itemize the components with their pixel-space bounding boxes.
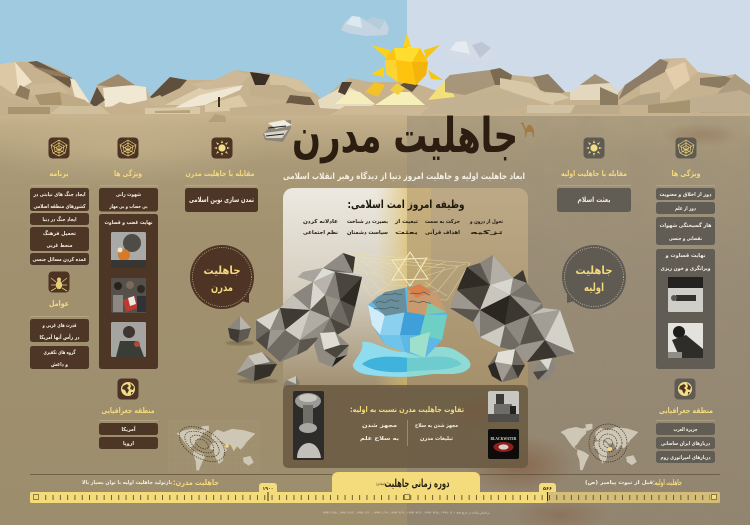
- box: extreme anger with photos: نهایت غضب و قساوت: [104, 220, 152, 226]
- low-poly mountains: [0, 58, 750, 122]
- icon: globe: [118, 378, 138, 400]
- box: extreme anger with photos: [99, 214, 158, 369]
- icon: globe: [674, 378, 696, 400]
- list: program items: [30, 188, 89, 265]
- list: regions: آمریکا: [122, 425, 136, 433]
- logo: Blackwater: [488, 429, 519, 459]
- duty: inner transformation: [469, 219, 503, 236]
- heading: geographic region: منطقه جغرافیایی: [659, 406, 713, 415]
- duty columns: [303, 218, 503, 236]
- list: early features: هار گسیختگی شهوات: [660, 222, 712, 229]
- title: جاهلیت مدرن: [292, 108, 518, 164]
- list: early features: [656, 188, 715, 245]
- panel: geography (early): [656, 378, 715, 463]
- difference: armed propaganda: تبلیغات مدرن: [420, 436, 453, 442]
- timeline line: [30, 473, 720, 476]
- difference: armed with science: به سلاح علم: [360, 436, 399, 442]
- speech bubble: early ignorance: اولیه: [584, 281, 604, 294]
- tab: timeline title: (میلادی): [376, 482, 385, 486]
- icon: camel: [520, 122, 534, 137]
- duty: following the mission: [394, 219, 418, 236]
- center panel: upper: [283, 188, 528, 388]
- duty: following the mission: تبعیت از: [394, 219, 418, 225]
- duty: inner transformation: تحول از درون و: [469, 219, 503, 225]
- tab: year 566: ۵۶۶: [543, 487, 552, 492]
- icon: sun: [212, 138, 232, 158]
- tab: timeline title: [376, 477, 450, 490]
- photo: man: [111, 322, 146, 357]
- list: factors: و داعش: [51, 362, 68, 368]
- caption: early ignorance timeline: جاهلیت اولیه:: [653, 478, 682, 487]
- photo: explosion: [111, 232, 146, 268]
- duty: quranic goals: حرکت به سمت: [425, 218, 460, 225]
- icon: web: [48, 138, 70, 158]
- photo: crowd: [111, 278, 146, 313]
- heading: confronting modern ignorance: مقابله با جاهلیت مدرن: [186, 169, 255, 178]
- box: lust: [99, 188, 158, 212]
- icon: web: [676, 138, 696, 158]
- tab: year 1900: ۱۹۰۰: [262, 487, 274, 492]
- list: regions: اروپا: [123, 441, 134, 447]
- mountain block: center left: [230, 72, 375, 115]
- box: extreme cruelty with photos: ویرانگری و خون ریزی: [660, 265, 710, 272]
- mountain block: far left: [0, 61, 90, 115]
- column: confrontation (modern): [185, 138, 258, 212]
- footnote: براساس بیانات در تاریخ های ۱۳۹۱/۰۶/۰۱ ، ۱۳۹۲/۰۳/۱۵ ، ۱۳۹۳/۰۳/۱۴ ، ۱۳۹۳/۰۴/۱۶ ، ۱۳۹۳/۱۰/۱۹ ، ۱۳۹۴/۰۱/۲۰ ، ۱۳۹۴/۰۳/۱۴ ، ۱۳۹۴/۰۶/۲۵: [322, 510, 490, 514]
- list: early features: دور از علم: [675, 206, 696, 212]
- duty: following the mission: بعثت: [395, 230, 418, 236]
- list: program items: کشورهای منطقه اسلامی: [34, 203, 86, 210]
- tab: year 566: [539, 483, 556, 501]
- list: program items: منحط غربی: [46, 243, 72, 249]
- column: features (early): [656, 138, 715, 369]
- photo: armed vehicle: [488, 391, 519, 422]
- sky background: [0, 0, 750, 125]
- photo: burial scene: [668, 277, 703, 312]
- subtitle: ابعاد جاهلیت اولیه و جاهلیت امروز دنیا از دیدگاه رهبر انقلاب اسلامی: [283, 171, 525, 182]
- heading: factors: عوامل: [49, 299, 69, 308]
- difference: armed propaganda: [415, 423, 458, 442]
- duty: quranic goals: اهداف قرآنی: [425, 228, 460, 236]
- duty: social justice: [303, 218, 338, 236]
- world map: modern: [168, 419, 260, 473]
- duty: insight: [347, 219, 388, 236]
- icon: spider: [48, 272, 70, 292]
- photo: mushroom cloud: [293, 391, 324, 460]
- panel: geography (modern): [99, 378, 158, 449]
- mountain block: center glow: [330, 80, 455, 115]
- heading: features: ویژگی ها: [672, 169, 701, 178]
- sun: [371, 33, 443, 85]
- puddle: [353, 342, 470, 377]
- difference: armed with science: [360, 423, 399, 442]
- heading: confronting early ignorance: مقابله با جاهلیت اولیه: [561, 169, 627, 178]
- ruler end markers: [34, 494, 716, 500]
- list: program items: تحمیل فرهنگ: [43, 230, 76, 237]
- column: features (modern): [99, 138, 158, 369]
- caption: modern ignorance timeline: جاهلیت مدرن:: [173, 478, 219, 487]
- heading: features: ویژگی ها: [114, 169, 142, 178]
- icon: tank scrap next to title: [263, 120, 292, 142]
- heading: differences: تفاوت جاهلیت مدرن نسبت به اولیه:: [350, 405, 464, 414]
- mountain block: far right: [618, 58, 750, 113]
- icon: web: [118, 138, 138, 158]
- box: new Islamic civilization: تمدن سازی نوین اسلامی: [189, 196, 254, 204]
- tab: timeline title: دوره زمانی جاهلیت: [384, 477, 450, 490]
- list: early features: دور از اخلاق و معنویت: [660, 192, 712, 198]
- difference: armed with science: مجهز شدن: [362, 423, 397, 429]
- speech bubble: modern ignorance: [190, 245, 254, 309]
- list: regions: دربارهای امپراتوری روم: [660, 455, 711, 461]
- column: confrontation (early): [557, 138, 631, 212]
- panel: today's duty heading: وظیفه امروز امت اسلامی:: [348, 198, 465, 211]
- timeline ruler: [30, 472, 720, 503]
- low-poly rock: large right: [450, 255, 575, 362]
- speech bubble: early ignorance: [562, 245, 626, 309]
- brain facets: [368, 284, 447, 358]
- caption: modern ignorance timeline: [82, 478, 219, 487]
- brain cortex: [372, 288, 407, 316]
- list: program items: ایجاد جنگ های نیابتی در: [33, 191, 86, 198]
- list: factors: قدرت های غربی و: [42, 323, 77, 329]
- heading: geographic region: منطقه جغرافیایی: [102, 406, 155, 415]
- difference: armed propaganda: مجهز شدن به سلاح: [415, 423, 458, 429]
- list: regions: جزیرة العرب: [674, 427, 698, 433]
- small rocks left: [226, 316, 349, 388]
- mountain block: right: [420, 68, 620, 115]
- box: advent of Islam: بعثت اسلام: [578, 196, 611, 204]
- small rocks right: [488, 349, 556, 382]
- list: early features: نفسانی و جنسی: [669, 236, 702, 242]
- caption: early ignorance timeline: [585, 478, 682, 487]
- logo: Blackwater: BLACKWATER: [490, 436, 517, 441]
- photo: soldier: [668, 323, 703, 358]
- list: program items: ایجاد جنگ در دنیا: [42, 216, 77, 223]
- list: factors: گروه های تکفیری: [44, 349, 76, 356]
- icon: sun: [584, 138, 604, 158]
- duty: quranic goals: [425, 218, 460, 236]
- box: extreme cruelty with photos: [656, 249, 715, 369]
- list: factors: در رأس آنها آمریکا: [40, 333, 80, 341]
- duty: insight: بصیرت در شناخت: [347, 219, 388, 225]
- caption: early ignorance timeline: قبل از نبوت پیامبر (ص): [585, 480, 654, 486]
- heading: program: برنامه: [50, 169, 69, 178]
- panel: differences of modern ignorance: [283, 385, 528, 468]
- list: regions: [656, 423, 715, 463]
- list: program items: عمده کردن مسائل جنسی: [32, 256, 87, 263]
- brain on melting puddle: [353, 284, 470, 377]
- speech bubble: modern ignorance: جاهلیت: [204, 264, 240, 277]
- world map: early: [560, 424, 638, 470]
- list: regions: [99, 423, 158, 449]
- box: lust: بی حساب و بی مهار: [109, 204, 148, 210]
- duty: social justice: نظم اجتماعی: [303, 230, 338, 236]
- list: regions: دربارهای ایران ساسانی: [661, 441, 710, 447]
- box: lust: شهوت رانی: [116, 192, 141, 198]
- list: factors: [30, 319, 89, 369]
- tab: year 1900: [259, 483, 277, 501]
- box: extreme cruelty with photos: نهایت قساوت و: [665, 253, 706, 259]
- clouds: [341, 16, 495, 62]
- duty: insight: سیاست دشمنان: [347, 230, 388, 236]
- web lines and star: [343, 252, 470, 300]
- mountain block: third: [145, 70, 250, 122]
- speech bubble: modern ignorance: مدرن: [211, 281, 233, 294]
- duty: inner transformation: تزکیه: [470, 229, 503, 236]
- duty: social justice: عادلانه کردن: [303, 218, 338, 225]
- caption: modern ignorance timeline: بازتولید جاهلیت اولیه با توان بسیار بالا: [82, 480, 172, 486]
- speech bubble: early ignorance: جاهلیت: [576, 264, 612, 277]
- column: program (modern): [30, 138, 89, 369]
- mountain block: second: [50, 74, 147, 114]
- low-poly rock: large left: [256, 253, 362, 362]
- desert ground background: [0, 113, 750, 525]
